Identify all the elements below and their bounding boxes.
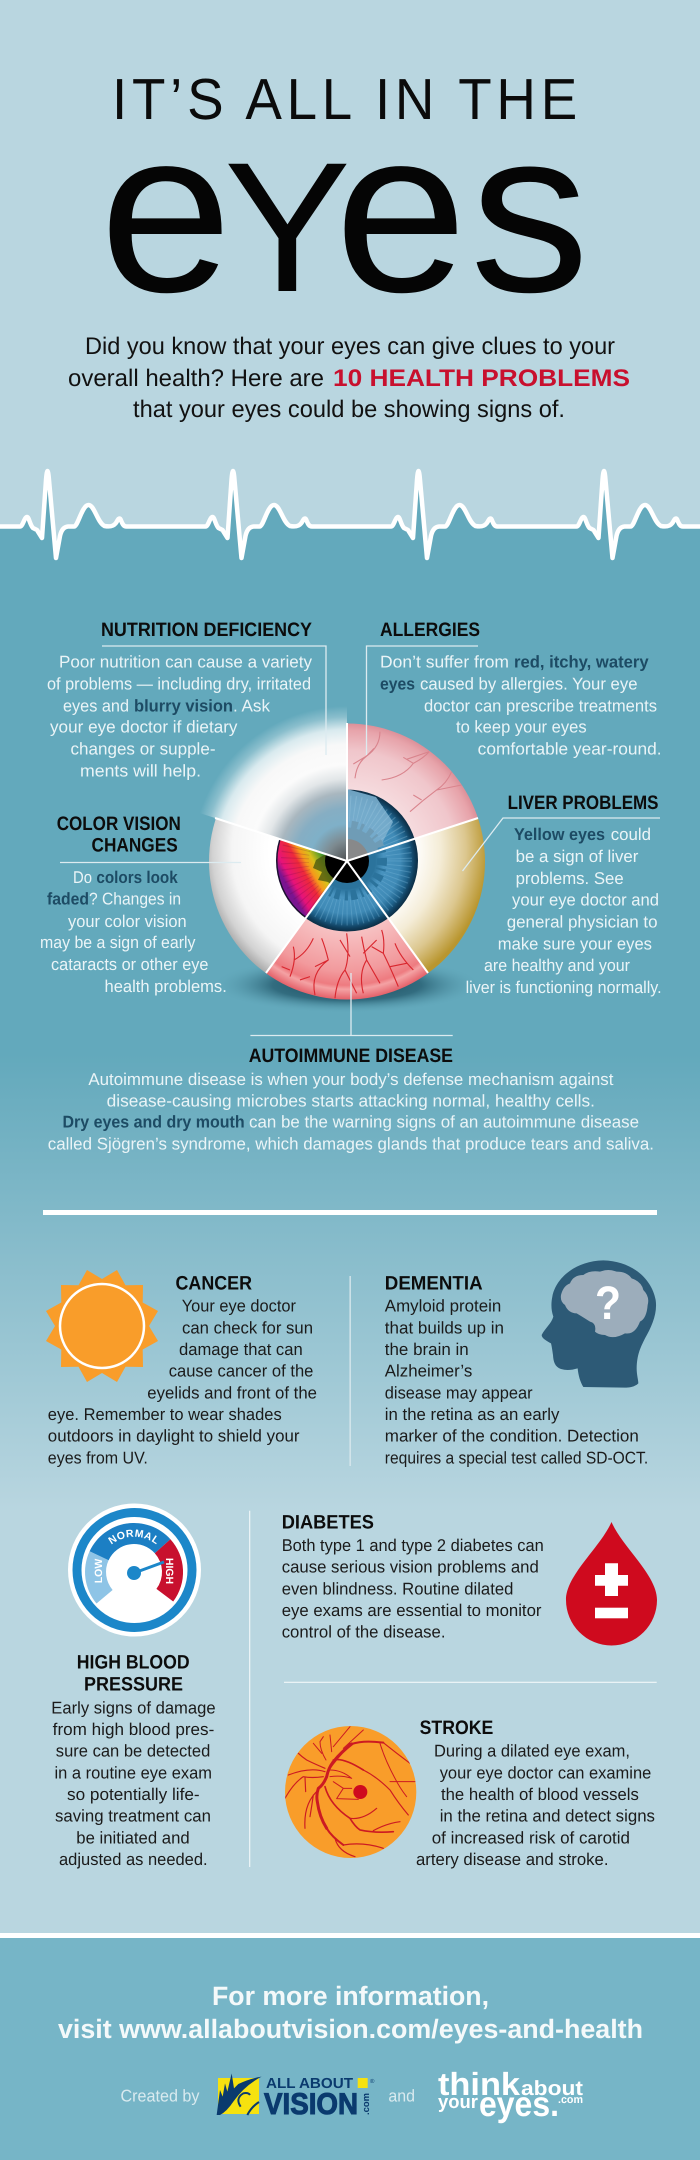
body: high blood pressure: so potentially life- bbox=[67, 1785, 200, 1804]
panel: footer bbox=[0, 1933, 700, 2160]
gradient teal section background bbox=[0, 590, 700, 1933]
callout line: autoimmune bbox=[250, 973, 453, 1036]
body: diabetes: Both type 1 and type 2 diabetes can bbox=[282, 1536, 544, 1555]
logo: think about your eyes: about bbox=[521, 2077, 583, 2100]
callout line: color vision bbox=[60, 862, 241, 864]
body: diabetes: cause serious vision problems and bbox=[282, 1558, 539, 1577]
body: dementia: requires a special test called SD-OCT. bbox=[385, 1448, 648, 1467]
body: dementia: in the retina as an early bbox=[385, 1405, 560, 1424]
body: liver bbox=[466, 825, 662, 997]
logo: think about your eyes: eyes. bbox=[479, 2085, 559, 2124]
body: liver: be a sign of liver bbox=[516, 847, 639, 866]
body: cancer: can check for sun bbox=[182, 1318, 313, 1337]
footer call to action bbox=[58, 1981, 643, 2044]
body: autoimmune: Dry eyes and dry mouth bbox=[62, 1113, 245, 1132]
body: color vision: colors look bbox=[96, 868, 178, 887]
body: high blood pressure: saving treatment can bbox=[55, 1807, 211, 1826]
body: color vision: ? Changes in bbox=[89, 890, 181, 909]
body: nutrition: changes or supple- bbox=[70, 740, 216, 759]
body: stroke: in the retina and detect signs bbox=[440, 1807, 655, 1826]
panel: liver problems bbox=[462, 792, 662, 997]
logo: think about your eyes: .com bbox=[558, 2094, 583, 2106]
body: dementia: disease may appear bbox=[385, 1383, 533, 1402]
footer call to action: visit www.allaboutvision.com/eyes-and-health bbox=[58, 2014, 643, 2044]
divider bar bbox=[43, 1210, 657, 1215]
intro text: 10 HEALTH PROBLEMS bbox=[333, 365, 630, 392]
heading: color vision changes: COLOR VISION bbox=[57, 813, 181, 835]
body: cancer: eye. Remember to wear shades bbox=[48, 1405, 282, 1424]
body: nutrition: blurry vision bbox=[134, 696, 233, 715]
body: nutrition: ments will help. bbox=[80, 761, 201, 780]
body: diabetes: even blindness. Routine dilated bbox=[282, 1579, 513, 1598]
body: color vision: health problems. bbox=[104, 977, 227, 996]
heading: cancer: CANCER bbox=[176, 1272, 252, 1294]
body: dementia: the brain in bbox=[385, 1340, 469, 1359]
body: high blood pressure: adjusted as needed. bbox=[59, 1850, 208, 1869]
body: diabetes: control of the disease. bbox=[282, 1623, 446, 1642]
icon: pressure gauge: HIGH bbox=[163, 1558, 175, 1584]
body: autoimmune: Autoimmune disease is when your body’s defense mechanism against bbox=[88, 1070, 614, 1089]
body: liver: liver is functioning normally. bbox=[466, 978, 662, 997]
body: allergies: red, itchy, watery bbox=[514, 653, 649, 672]
body: autoimmune: disease-causing microbes starts attacking normal, healthy cells. bbox=[107, 1092, 595, 1111]
heading: allergies: ALLERGIES bbox=[380, 619, 480, 641]
body: cancer bbox=[48, 1297, 317, 1467]
body: liver: are healthy and your bbox=[484, 956, 630, 975]
body: dementia: that builds up in bbox=[385, 1318, 504, 1337]
icon: retina bbox=[285, 1726, 416, 1858]
body: high blood pressure: from high blood pres- bbox=[53, 1720, 214, 1739]
horizontal divider stroke panel bbox=[284, 1682, 657, 1683]
heading: high blood pressure bbox=[77, 1652, 190, 1696]
logo: think about your eyes bbox=[438, 2066, 583, 2124]
body: liver: could bbox=[611, 825, 651, 844]
panel: stroke bbox=[285, 1717, 655, 1869]
body: liver: problems. See bbox=[516, 869, 624, 888]
body: dementia: Amyloid protein bbox=[385, 1297, 501, 1316]
panel: nutrition deficiency bbox=[47, 619, 326, 780]
body: dementia bbox=[385, 1297, 648, 1467]
body: nutrition: eyes and bbox=[63, 696, 129, 715]
sector: allergies sclera bbox=[348, 724, 478, 860]
callout line: liver bbox=[462, 818, 660, 871]
panel: color vision changes bbox=[40, 813, 241, 996]
body: cancer: eyes from UV. bbox=[48, 1448, 148, 1467]
heading: high blood pressure: PRESSURE bbox=[84, 1674, 183, 1696]
icon: pressure gauge bbox=[68, 1504, 201, 1636]
body: stroke: your eye doctor can examine bbox=[440, 1763, 651, 1782]
logo: think about your eyes: think bbox=[438, 2066, 520, 2102]
heading: autoimmune disease: AUTOIMMUNE DISEASE bbox=[249, 1045, 453, 1067]
body: color vision: your color vision bbox=[68, 912, 187, 931]
body: dementia: Alzheimer’s bbox=[385, 1362, 472, 1381]
intro text: Did you know that your eyes can give clues to your bbox=[85, 333, 615, 360]
body: stroke bbox=[416, 1742, 655, 1869]
logo: all about vision: ® bbox=[370, 2078, 375, 2085]
body: color vision: may be a sign of early bbox=[40, 933, 196, 952]
body: liver: Yellow eyes bbox=[514, 825, 605, 844]
panel: high blood pressure bbox=[51, 1504, 216, 1869]
body: allergies: Don’t suffer from bbox=[380, 653, 509, 672]
callout line: nutrition bbox=[102, 646, 326, 755]
callout line: allergies bbox=[366, 646, 478, 755]
logo: all about vision bbox=[217, 2073, 375, 2121]
body: high blood pressure: Early signs of damage bbox=[51, 1698, 216, 1717]
body: liver: make sure your eyes bbox=[498, 934, 652, 953]
created by label: Created by bbox=[120, 2087, 200, 2106]
body: high blood pressure: be initiated and bbox=[76, 1828, 190, 1847]
body: stroke: of increased risk of carotid bbox=[432, 1828, 630, 1847]
sector: color vision white sclera and rainbow iris bbox=[209, 819, 346, 973]
title: eyes: eYes bbox=[100, 82, 589, 341]
body: liver: your eye doctor and bbox=[512, 891, 659, 910]
body: nutrition: . Ask bbox=[233, 696, 270, 715]
footer call to action: For more information, bbox=[212, 1981, 489, 2011]
title: It's all in the: IT’S ALL IN THE bbox=[112, 67, 582, 132]
body: color vision: faded bbox=[47, 890, 89, 909]
body: nutrition: of problems — including dry, irritated bbox=[47, 674, 311, 694]
body: nutrition: your eye doctor if dietary bbox=[50, 718, 238, 737]
sector: autoimmune red sclera bbox=[266, 862, 428, 1000]
logo: all about vision: .com bbox=[361, 2093, 372, 2115]
body: allergies: doctor can prescribe treatments bbox=[424, 696, 657, 715]
body: color vision: Do bbox=[73, 868, 92, 887]
body: stroke: During a dilated eye exam, bbox=[434, 1742, 630, 1761]
body: nutrition bbox=[47, 653, 312, 780]
body: autoimmune: called Sjögren’s syndrome, which damages glands that produce tears and saliva. bbox=[48, 1134, 654, 1154]
body: autoimmune: can be the warning signs of an autoimmune disease bbox=[249, 1113, 639, 1132]
body: color vision: cataracts or other eye bbox=[51, 955, 208, 974]
heading: high blood pressure: HIGH BLOOD bbox=[77, 1652, 190, 1674]
heading: color vision changes bbox=[57, 813, 181, 856]
body: allergies: comfortable year-round. bbox=[478, 740, 662, 759]
heading: dementia: DEMENTIA bbox=[385, 1272, 483, 1294]
panel: cancer bbox=[46, 1270, 317, 1467]
vertical divider lower row bbox=[249, 1511, 250, 1867]
icon: head with brain: ? bbox=[595, 1276, 621, 1329]
body: high blood pressure: in a routine eye exam bbox=[54, 1763, 212, 1782]
heading: stroke: STROKE bbox=[420, 1717, 493, 1739]
body: cancer: eyelids and front of the bbox=[147, 1383, 317, 1402]
body: color vision bbox=[40, 868, 227, 996]
sector divider lines bbox=[215, 723, 478, 973]
body: nutrition: Poor nutrition can cause a variety bbox=[59, 653, 312, 672]
panel: autoimmune disease bbox=[48, 973, 654, 1154]
and label: and bbox=[388, 2087, 415, 2106]
eye illustration bbox=[200, 706, 485, 1013]
icon: blood drop bbox=[566, 1522, 657, 1646]
heading: diabetes: DIABETES bbox=[282, 1512, 374, 1534]
logo: all about vision: VISION bbox=[264, 2088, 358, 2121]
heading: color vision changes: CHANGES bbox=[92, 834, 178, 856]
body: liver: general physician to bbox=[507, 912, 658, 932]
panel: allergies bbox=[366, 619, 662, 759]
icon: sun bbox=[46, 1270, 158, 1382]
sector: blurry vision (top left) bbox=[200, 706, 347, 861]
body: allergies: caused by allergies. Your eye bbox=[420, 674, 638, 694]
body: diabetes bbox=[282, 1536, 544, 1642]
panel: dementia bbox=[385, 1260, 656, 1467]
intro text: overall health? Here are bbox=[68, 365, 324, 392]
body: high blood pressure: sure can be detected bbox=[56, 1742, 210, 1761]
icon: pressure gauge: NORMAL bbox=[108, 1530, 157, 1544]
body: cancer: cause cancer of the bbox=[169, 1362, 313, 1381]
body: allergies: to keep your eyes bbox=[456, 718, 587, 737]
vertical divider top row bbox=[350, 1276, 351, 1466]
body: cancer: damage that can bbox=[179, 1340, 303, 1359]
body: allergies: eyes bbox=[380, 674, 415, 694]
body: stroke: the health of blood vessels bbox=[441, 1785, 639, 1804]
body: high blood pressure bbox=[51, 1698, 216, 1869]
icon: head with brain bbox=[542, 1260, 656, 1388]
heading: liver problems: LIVER PROBLEMS bbox=[508, 792, 658, 814]
intro text: that your eyes could be showing signs of. bbox=[133, 396, 565, 423]
logo: all about vision: ALL ABOUT bbox=[266, 2076, 353, 2092]
body: autoimmune bbox=[48, 1070, 654, 1154]
logo: think about your eyes: your bbox=[438, 2092, 479, 2113]
eye drop shadow bbox=[212, 957, 482, 1013]
body: diabetes: eye exams are essential to monitor bbox=[282, 1601, 542, 1620]
body: dementia: marker of the condition. Detection bbox=[385, 1427, 639, 1446]
panel: diabetes bbox=[282, 1512, 657, 1646]
body: cancer: Your eye doctor bbox=[182, 1297, 296, 1316]
heartbeat line with teal fill below bbox=[0, 471, 700, 600]
body: cancer: outdoors in daylight to shield your bbox=[48, 1427, 300, 1446]
intro text bbox=[68, 333, 630, 423]
icon: pressure gauge: LOW bbox=[93, 1559, 105, 1583]
body: stroke: artery disease and stroke. bbox=[416, 1850, 608, 1869]
sector: yellow eyes bbox=[348, 818, 485, 973]
body: allergies bbox=[380, 653, 662, 759]
heading: nutrition deficiency: NUTRITION DEFICIENCY bbox=[101, 619, 312, 641]
